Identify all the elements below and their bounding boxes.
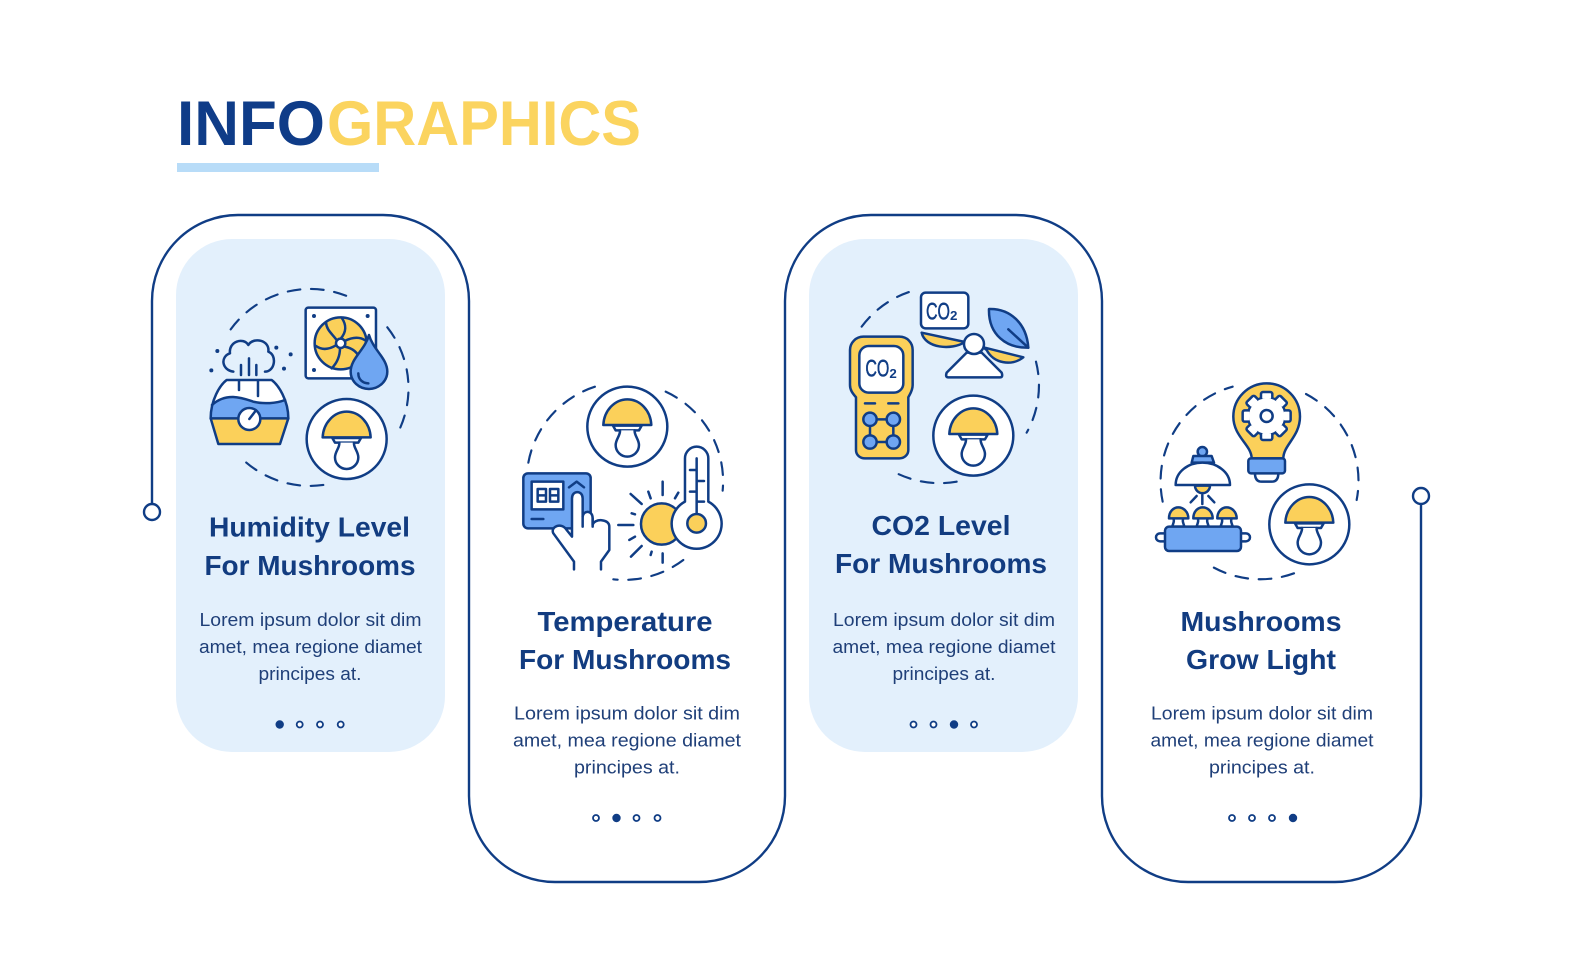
panel: CO2 xyxy=(832,292,1056,728)
body text: temperature: amet, mea regione diamet xyxy=(513,730,741,750)
heading: temperature: Temperature xyxy=(538,606,712,637)
heading: CO2 xyxy=(835,510,1047,579)
heading: temperature: For Mushrooms xyxy=(519,644,731,675)
panel: humidity xyxy=(199,289,422,728)
icon: CO2 meter, scale and mushroom: CO xyxy=(865,356,889,383)
icon: humidifier, fan and mushroom xyxy=(209,289,408,486)
icon: thermostat, sun and mushroom xyxy=(523,387,723,580)
body text: grow light: principes at. xyxy=(1209,758,1315,778)
body text: temperature xyxy=(513,704,741,778)
body text: humidity: amet, mea regione diamet xyxy=(199,637,422,657)
body text: humidity: Lorem ipsum dolor sit dim xyxy=(200,610,422,630)
icon: lamp, gear bulb and mushroom xyxy=(1156,383,1358,579)
heading: CO2: CO2 Level xyxy=(872,510,1010,541)
panel: temperature xyxy=(513,387,741,821)
panel background: humidity xyxy=(176,239,445,752)
pagination dots: step 1 xyxy=(276,721,344,728)
heading: humidity: Humidity Level xyxy=(209,512,410,543)
icon: CO2 meter, scale and mushroom: 2 xyxy=(950,308,957,323)
body text: temperature: principes at. xyxy=(574,758,680,778)
title: INFO xyxy=(177,89,325,159)
connecting outline xyxy=(144,215,1429,882)
body text: CO2 xyxy=(832,610,1056,684)
title xyxy=(177,89,641,159)
pagination dots: step 3 xyxy=(910,721,977,728)
body text: grow light: Lorem ipsum dolor sit dim xyxy=(1151,704,1373,724)
icon: CO2 meter, scale and mushroom xyxy=(850,292,1039,483)
panel: grow light xyxy=(1150,383,1374,821)
icon: CO2 meter, scale and mushroom: 2 xyxy=(889,366,897,381)
title: GRAPHICS xyxy=(327,89,641,159)
heading: grow light: Mushrooms xyxy=(1180,606,1342,637)
body text: CO2: amet, mea regione diamet xyxy=(832,637,1056,657)
body text: grow light: amet, mea regione diamet xyxy=(1150,730,1374,750)
heading: temperature xyxy=(519,606,731,675)
heading: humidity: For Mushrooms xyxy=(204,550,416,581)
heading: grow light: Grow Light xyxy=(1186,644,1336,675)
body text: temperature: Lorem ipsum dolor sit dim xyxy=(514,704,740,724)
body text: humidity xyxy=(199,610,422,684)
body text: humidity: principes at. xyxy=(258,664,362,684)
heading: grow light xyxy=(1180,606,1342,675)
heading: CO2: For Mushrooms xyxy=(835,548,1047,579)
heading: humidity xyxy=(204,512,416,581)
pagination dots: step 2 xyxy=(593,815,660,821)
body text: CO2: principes at. xyxy=(892,664,996,684)
title underline xyxy=(177,163,379,172)
pagination dots: step 4 xyxy=(1229,815,1296,821)
body text: grow light xyxy=(1150,704,1374,778)
panel background: CO2 xyxy=(809,239,1078,752)
body text: CO2: Lorem ipsum dolor sit dim xyxy=(833,610,1055,630)
icon: CO2 meter, scale and mushroom: CO xyxy=(926,298,950,325)
